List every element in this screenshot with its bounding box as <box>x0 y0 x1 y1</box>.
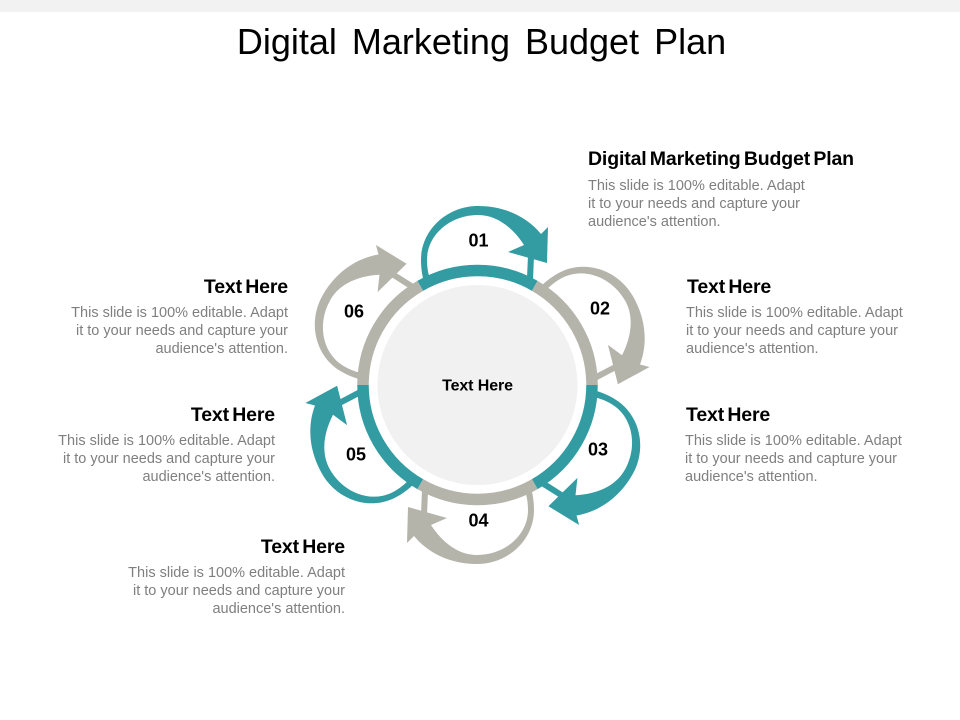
numbers: 03 <box>588 440 608 460</box>
text block 03: This slide is 100% editable. Adapt <box>685 433 902 449</box>
text block 03: it to your needs and capture your <box>685 451 897 467</box>
inner circle <box>378 285 578 485</box>
text block 05: Text Here <box>191 404 275 426</box>
text block 04: it to your needs and capture your <box>133 583 345 599</box>
text block 01: it to your needs and capture your <box>588 196 800 212</box>
text block 02 <box>686 276 903 357</box>
text block 06: it to your needs and capture your <box>76 323 288 339</box>
arrow 05 <box>287 375 417 523</box>
ring segments <box>363 271 592 499</box>
numbers: 06 <box>344 302 364 322</box>
text block 05: audience's attention. <box>142 469 275 485</box>
text block 06: Text Here <box>204 276 288 298</box>
numbers: 05 <box>346 444 366 464</box>
arrow 04 <box>407 488 534 564</box>
title: Digital Marketing Budget Plan <box>237 21 726 62</box>
text block 03 <box>685 404 902 485</box>
text block 05 <box>58 404 275 485</box>
center label: Text Here <box>442 378 513 394</box>
arrow 06 <box>294 234 424 382</box>
text block 05: it to your needs and capture your <box>63 451 275 467</box>
text block 02: This slide is 100% editable. Adapt <box>686 305 903 321</box>
text block 04: audience's attention. <box>212 601 345 617</box>
text block 04: This slide is 100% editable. Adapt <box>128 565 345 581</box>
text block 06: audience's attention. <box>155 341 288 357</box>
text block 04: Text Here <box>261 536 345 558</box>
numbers: 01 <box>468 230 489 250</box>
arrow 02 <box>538 247 668 395</box>
arrow 03 <box>531 388 661 536</box>
arrow 01 <box>421 206 548 282</box>
text block 03: Text Here <box>686 404 770 426</box>
text block 02: it to your needs and capture your <box>686 323 898 339</box>
text block 06 <box>71 276 288 357</box>
numbers: 02 <box>590 298 610 318</box>
text block 02: audience's attention. <box>686 341 819 357</box>
text block 05: This slide is 100% editable. Adapt <box>58 433 275 449</box>
text block 06: This slide is 100% editable. Adapt <box>71 305 288 321</box>
numbers <box>344 230 610 530</box>
text block 01: audience's attention. <box>588 214 721 230</box>
text block 02: Text Here <box>687 276 771 298</box>
text block 04 <box>128 536 345 617</box>
text block 01: This slide is 100% editable. Adapt <box>588 178 805 194</box>
text block 01: Digital Marketing Budget Plan <box>588 148 854 170</box>
text block 01 <box>588 148 854 230</box>
text block 03: audience's attention. <box>685 469 818 485</box>
numbers: 04 <box>468 510 489 530</box>
